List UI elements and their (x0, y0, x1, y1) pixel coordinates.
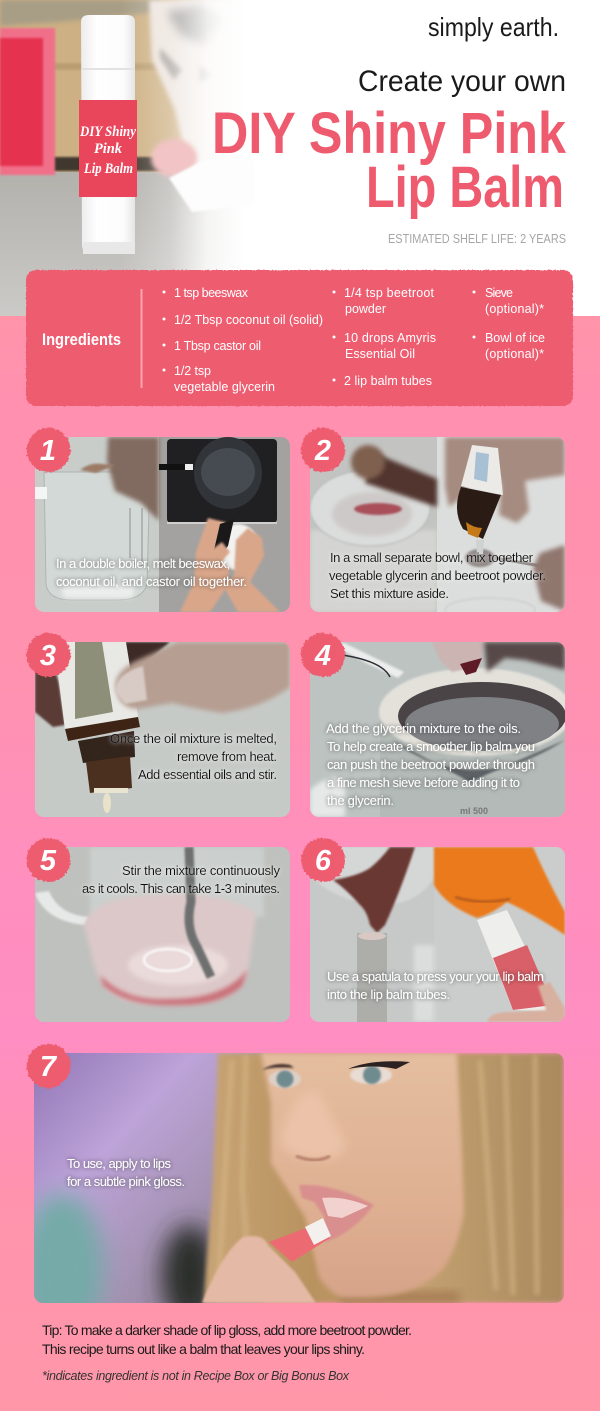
panel: step 6 (301, 838, 565, 1022)
step 4 text: the glycerin. (327, 793, 394, 808)
step 6 photo (310, 847, 565, 1022)
ingredient list column 2: 10 drops Amyris (344, 331, 436, 345)
step 1 text (56, 556, 247, 589)
step 2 text: vegetable glycerin and beetroot powder. (329, 568, 546, 583)
step 6 text: Use a spatula to press your your lip balm (327, 969, 544, 984)
badge 4: 4 (314, 640, 331, 672)
step 5 photo (35, 847, 290, 1022)
step 2 text (329, 550, 546, 601)
header photo: lip balm tube (0, 0, 218, 316)
step 5 text: as it cools. This can take 1-3 minutes. (82, 881, 280, 896)
ingredient list column 1: 1 tsp beeswax (174, 286, 249, 300)
step 1 text: coconut oil, and castor oil together. (56, 574, 247, 589)
step 1 photo (35, 437, 290, 612)
ingredient list column 1: vegetable glycerin (174, 380, 275, 394)
tube label (79, 100, 137, 197)
step 3 text (110, 731, 277, 782)
step 4 photo (310, 642, 573, 817)
badge 4 (301, 633, 345, 677)
panel: ingredients (26, 270, 573, 406)
logo: simply earth. (428, 12, 559, 42)
ingredient list column 3: (optional)* (485, 302, 544, 316)
step 7 text: To use, apply to lips (67, 1156, 172, 1171)
ingredient list column 3: Sieve (485, 286, 513, 300)
step 3 text: Add essential oils and stir. (138, 767, 277, 782)
ingredient list column 2: 2 lip balm tubes (344, 374, 432, 388)
badge 7 (26, 1044, 70, 1088)
step 7 text: for a subtle pink gloss. (67, 1174, 185, 1189)
ingredient list column 1: 1/2 Tbsp coconut oil (solid) (174, 313, 323, 327)
footnote: *indicates ingredient is not in Recipe Box or Big Bonus Box (42, 1369, 350, 1383)
step 2 text: In a small separate bowl, mix together (330, 550, 534, 565)
ingredient list column 1: 1 Tbsp castor oil (174, 339, 261, 353)
ingredient list column 2: Essential Oil (345, 347, 415, 361)
step 2 text: Set this mixture aside. (330, 586, 449, 601)
badge 1 (26, 428, 70, 472)
step 5 text (82, 863, 280, 896)
panel: step 5 (26, 838, 290, 1022)
badge 6 (301, 838, 345, 882)
ingredient list column 2: powder (345, 302, 386, 316)
badge 5: 5 (40, 845, 57, 877)
step 7 text (67, 1156, 185, 1189)
badge 3: 3 (40, 640, 56, 672)
ingredient list column 1 (162, 286, 323, 394)
title: Create your own (358, 65, 566, 98)
step 3 text: Once the oil mixture is melted, (110, 731, 277, 746)
panel: step 2 (301, 428, 565, 622)
step 4 text: can push the beetroot powder through (327, 757, 535, 772)
badge 6: 6 (315, 845, 332, 877)
step 4 text: a fine mesh sieve before adding it to (327, 775, 520, 790)
ingredient list column 3 (472, 286, 545, 361)
panel: step 4 (301, 633, 573, 817)
ingredients heading: Ingredients (42, 330, 121, 349)
step 2 photo (310, 437, 565, 622)
step 5 text: Stir the mixture continuously (122, 863, 280, 878)
step 4 text: To help create a smoother lip balm you (327, 739, 535, 754)
badge 2 (301, 428, 345, 472)
tip: This recipe turns out like a balm that leaves your lips shiny. (42, 1341, 365, 1357)
tip: Tip: To make a darker shade of lip gloss, add more beetroot powder. (42, 1322, 412, 1338)
panel: step 3 (26, 633, 290, 817)
ingredient list column 3: (optional)* (485, 347, 544, 361)
ingredient list column 1: 1/2 tsp (174, 364, 211, 378)
step 6 text (327, 969, 544, 1002)
tube label: Pink (94, 141, 122, 157)
step 4 text (326, 721, 535, 808)
step 4 photo: ml 500 (460, 806, 488, 816)
step 4 text: Add the glycerin mixture to the oils. (326, 721, 521, 736)
panel: step 1 (26, 428, 290, 612)
step 7 photo (34, 1053, 564, 1303)
tip (42, 1322, 412, 1357)
badge 2: 2 (314, 435, 331, 467)
badge 3 (26, 633, 70, 677)
step 3 photo (35, 642, 290, 817)
step 3 text: remove from heat. (177, 749, 277, 764)
title: ESTIMATED SHELF LIFE: 2 YEARS (388, 231, 566, 246)
ingredient list column 2: 1/4 tsp beetroot (344, 286, 435, 300)
step 6 text: into the lip balm tubes. (327, 987, 450, 1002)
tube label: DIY Shiny (79, 124, 136, 140)
step 1 text: In a double boiler, melt beeswax, (56, 556, 230, 571)
badge 1: 1 (40, 435, 56, 467)
tube label: Lip Balm (83, 161, 133, 177)
ingredient list column 2 (332, 286, 436, 388)
badge 7: 7 (40, 1051, 58, 1083)
panel: step 7 (26, 1044, 564, 1303)
title (212, 65, 567, 246)
ingredient list column 3: Bowl of ice (485, 331, 545, 345)
badge 5 (26, 838, 70, 882)
